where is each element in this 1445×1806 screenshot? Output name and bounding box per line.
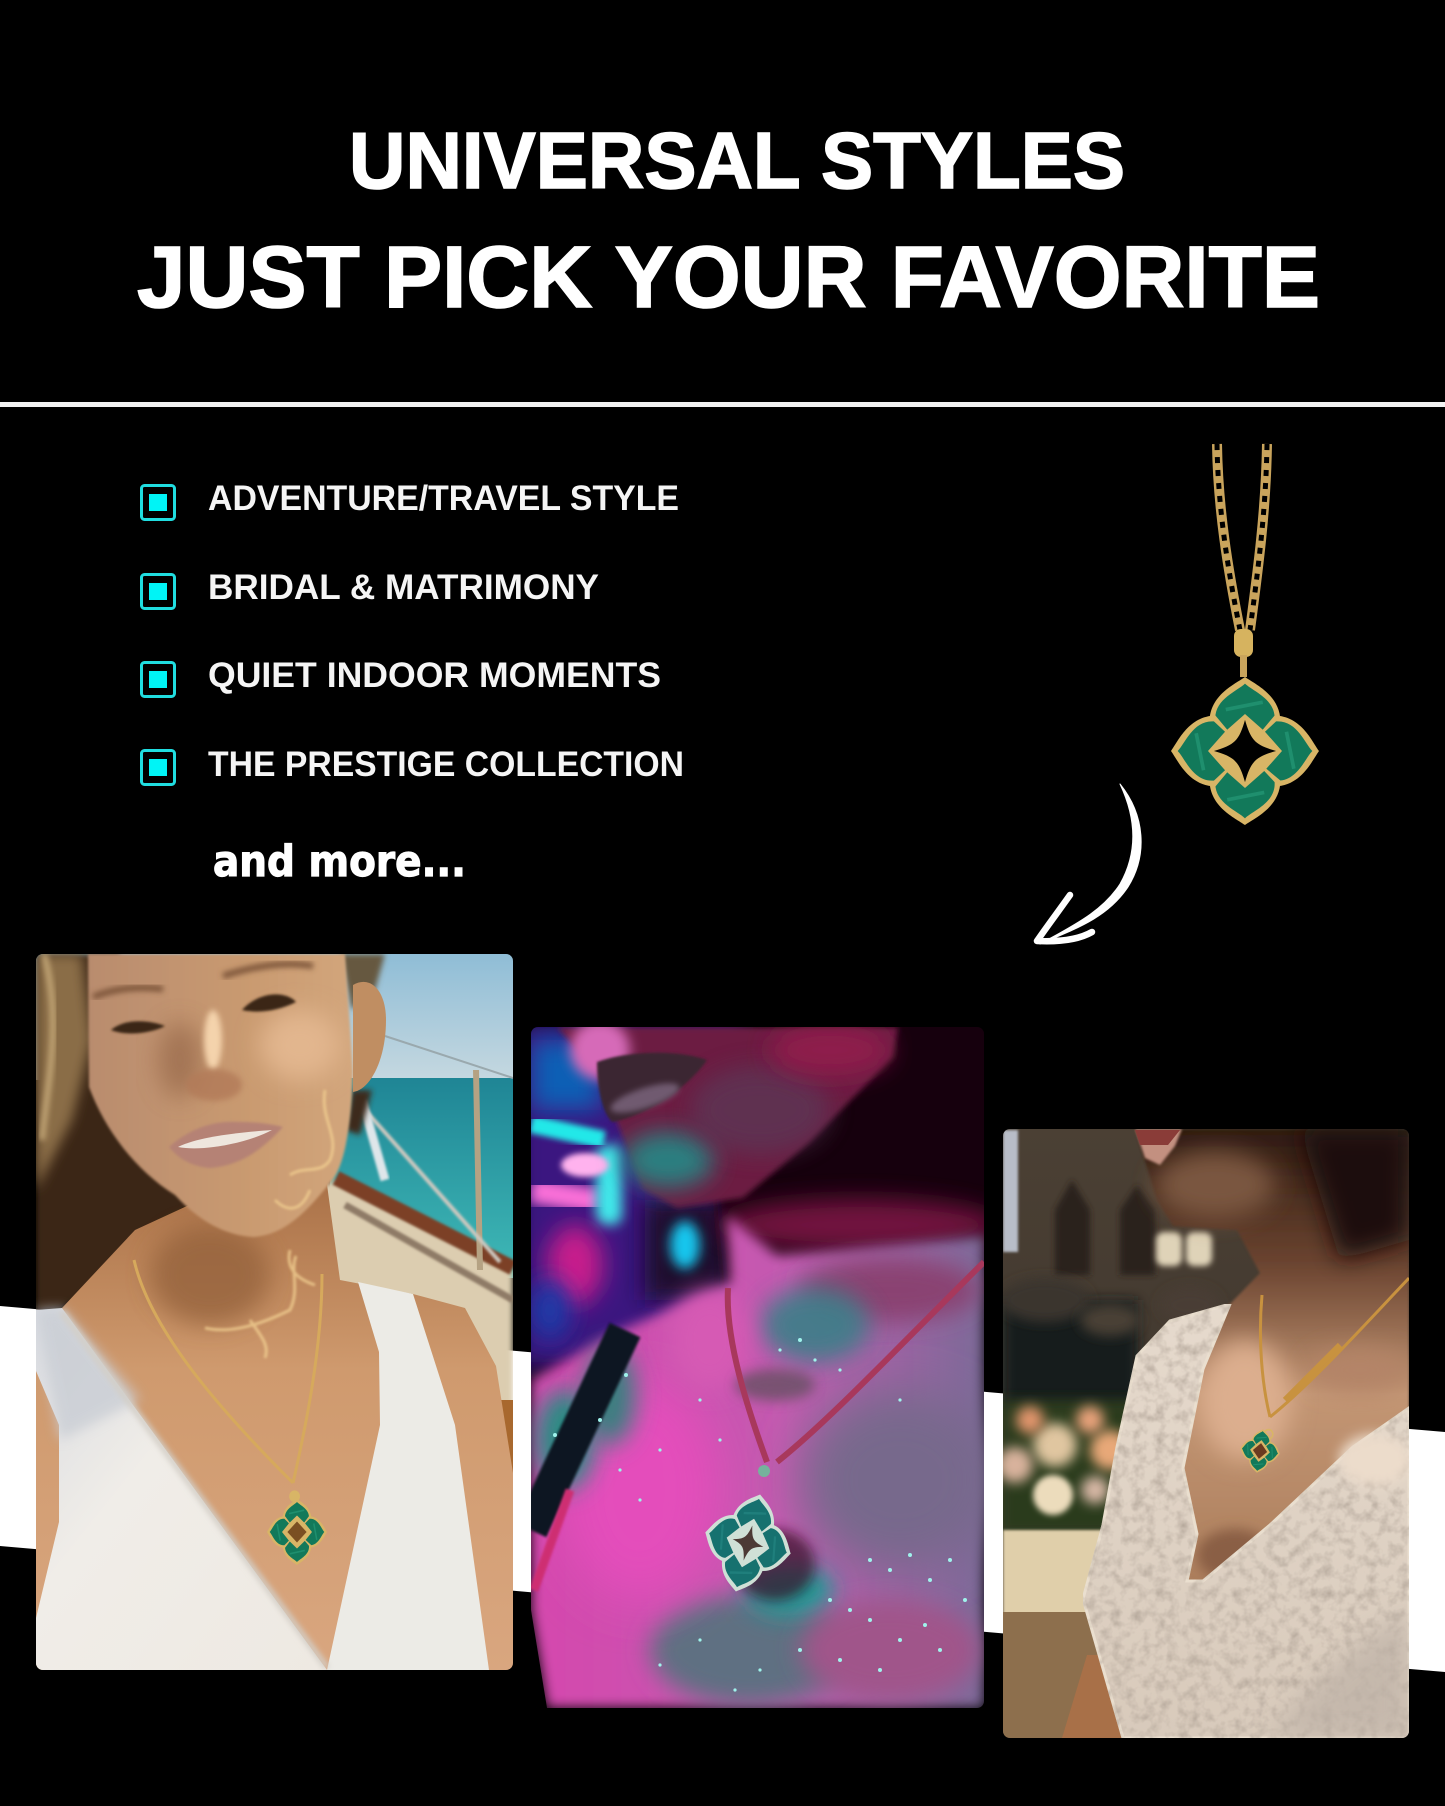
bail	[1234, 629, 1253, 657]
base	[531, 1352, 984, 1632]
sky	[36, 954, 513, 1080]
arm	[1062, 1655, 1125, 1738]
lace dress	[1083, 1304, 1411, 1738]
title: UNIVERSAL STYLES	[349, 116, 1125, 205]
church background	[1003, 1129, 1409, 1738]
ear	[353, 982, 386, 1092]
flowers	[997, 1400, 1140, 1535]
dark corner	[531, 1610, 547, 1708]
divider line	[0, 402, 1445, 407]
face	[557, 1027, 898, 1208]
chain	[134, 1260, 322, 1483]
chain	[1217, 444, 1267, 630]
neck shadow	[150, 1225, 270, 1325]
chain	[1260, 1278, 1409, 1417]
item: quiet indoor: QUIET INDOOR MOMENTS	[208, 656, 661, 695]
photo: wedding	[997, 1129, 1411, 1740]
mouth	[169, 1122, 283, 1168]
altar	[1003, 1530, 1133, 1618]
photo: sailing	[36, 954, 513, 1670]
lips	[1135, 1129, 1182, 1165]
eyes and brows	[93, 964, 313, 1033]
style list	[142, 479, 684, 784]
item: bridal: BRIDAL & MATRIMONY	[208, 568, 599, 607]
windows and niches	[1003, 1130, 1212, 1275]
boat deck	[327, 1035, 513, 1473]
facial shading	[260, 1010, 340, 1080]
pendant	[1171, 677, 1319, 825]
and more text: and more...	[213, 837, 466, 887]
white diagonal band	[0, 1306, 1445, 1672]
cleavage shadow	[1197, 1529, 1273, 1581]
hair	[36, 954, 385, 1312]
chest shading	[535, 1258, 1000, 1705]
chest	[531, 1215, 984, 1708]
face shadow	[1300, 1129, 1409, 1260]
pendant	[267, 1490, 327, 1565]
neck and chest	[1135, 1129, 1409, 1610]
arrow	[1037, 784, 1141, 944]
chain	[728, 1262, 984, 1462]
title: JUST PICK YOUR FAVORITE	[137, 229, 1320, 326]
product necklace	[1171, 444, 1319, 825]
crowd	[1000, 1278, 1220, 1410]
pendant	[693, 1484, 803, 1602]
caustic light	[205, 1090, 333, 1358]
item: prestige: THE PRESTIGE COLLECTION	[208, 745, 684, 784]
photo: neon	[531, 1027, 984, 1708]
sea	[330, 1078, 513, 1278]
pendant bail	[758, 1465, 770, 1477]
neon backdrop	[515, 1020, 745, 1370]
lips	[597, 1053, 707, 1122]
sparkles	[553, 1338, 967, 1692]
strap	[531, 1330, 625, 1530]
chest light	[1199, 1340, 1291, 1460]
title	[137, 116, 1320, 326]
neck	[711, 1027, 984, 1286]
item: adventure/travel: ADVENTURE/TRAVEL STYLE	[208, 479, 679, 518]
neck and chest skin	[36, 1170, 513, 1670]
face	[88, 954, 353, 1237]
pendant	[1237, 1426, 1283, 1476]
shirt	[36, 1282, 489, 1670]
pendant shadow	[735, 1529, 815, 1601]
